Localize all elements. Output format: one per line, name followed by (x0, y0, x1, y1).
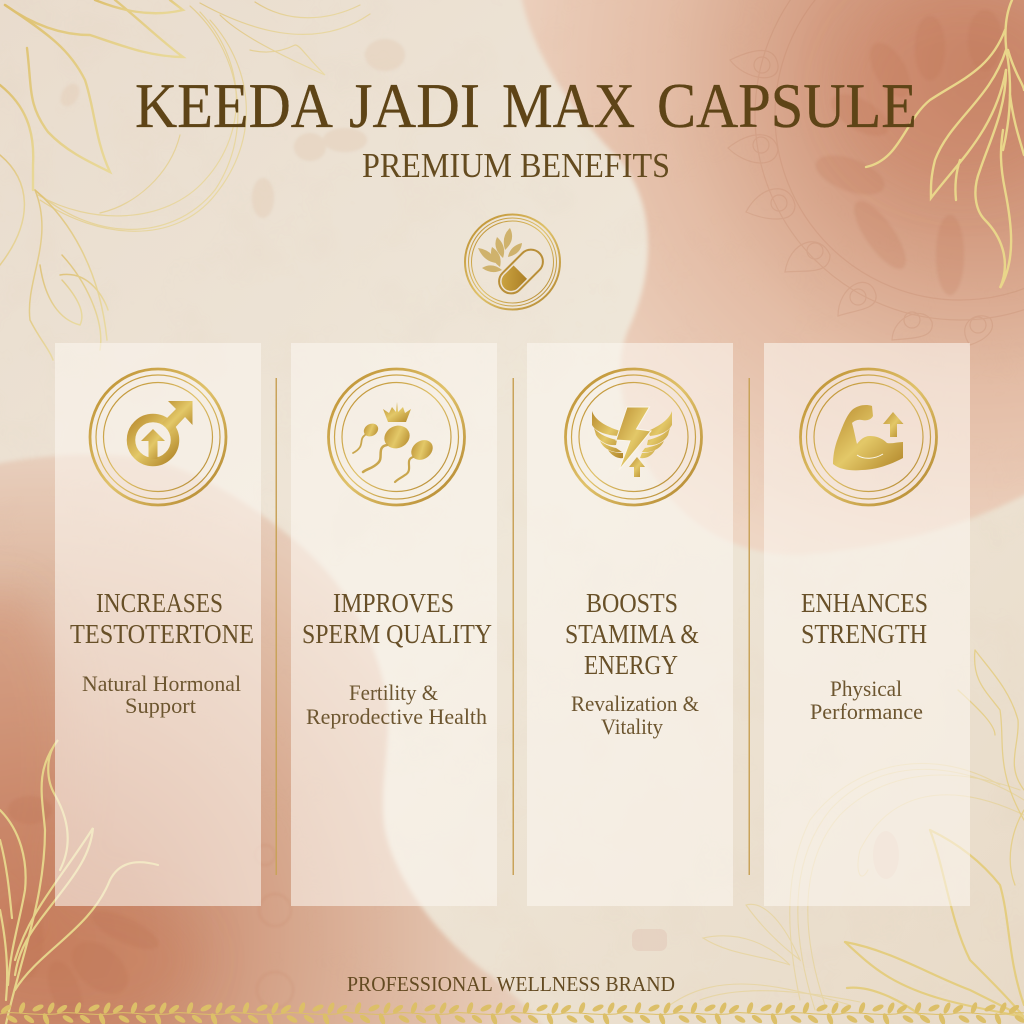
description: Performance (810, 699, 923, 724)
description (82, 671, 241, 718)
title: MAX (502, 70, 635, 141)
gold foliage top left (0, 0, 370, 360)
decorative mandala top right (728, 0, 1024, 345)
panel: improves sperm quality (291, 343, 497, 906)
mandala petals top right (811, 10, 1002, 295)
heading (70, 588, 254, 649)
icon: crowned sperm cells (328, 369, 464, 505)
gold foliage bottom right (670, 650, 1024, 1017)
description: Support (125, 693, 196, 718)
panel: enhances strength (764, 343, 970, 906)
description (571, 691, 699, 739)
gold foliage top right (866, 0, 1024, 288)
title: KEEDA (135, 70, 333, 141)
heading: STRENGTH (801, 619, 927, 649)
heading: ENHANCES (801, 588, 928, 618)
icon: capsule and herb badge (465, 214, 560, 310)
panel: boosts stamina and energy (527, 343, 733, 906)
heading (565, 588, 699, 680)
description: Revalization & (571, 691, 699, 716)
heading: TESTOTERTONE (70, 619, 254, 649)
footer brand line: PROFESSIONAL WELLNESS BRAND (347, 972, 675, 996)
panel: increases testosterone (55, 343, 261, 906)
title (135, 70, 917, 141)
description: Physical (830, 676, 902, 701)
heading: STAMIMA & (565, 619, 699, 649)
heading: IMPROVES (333, 588, 454, 618)
description (306, 680, 487, 729)
subtitle: PREMIUM BENEFITS (362, 146, 670, 185)
description: Vitality (601, 714, 663, 739)
title: CAPSULE (657, 70, 917, 141)
title: JADI (349, 70, 480, 141)
description: Natural Hormonal (82, 671, 241, 696)
description (810, 676, 923, 724)
heading: ENERGY (584, 650, 678, 680)
heading: BOOSTS (586, 588, 678, 618)
icon: male symbol with up arrow (90, 369, 226, 505)
heading: SPERM QUALITY (302, 619, 492, 649)
description: Fertility & (349, 680, 438, 705)
icon: winged lightning bolt (566, 369, 702, 505)
heading (801, 588, 928, 649)
gold foliage bottom left (0, 740, 158, 1024)
icon: flexed bicep with arrow (800, 369, 936, 505)
heading (302, 588, 492, 649)
gold garland along bottom edge (0, 1001, 1024, 1024)
heading: INCREASES (96, 588, 223, 618)
description: Reprodective Health (306, 704, 487, 729)
mandala petals bottom left (7, 796, 293, 1023)
